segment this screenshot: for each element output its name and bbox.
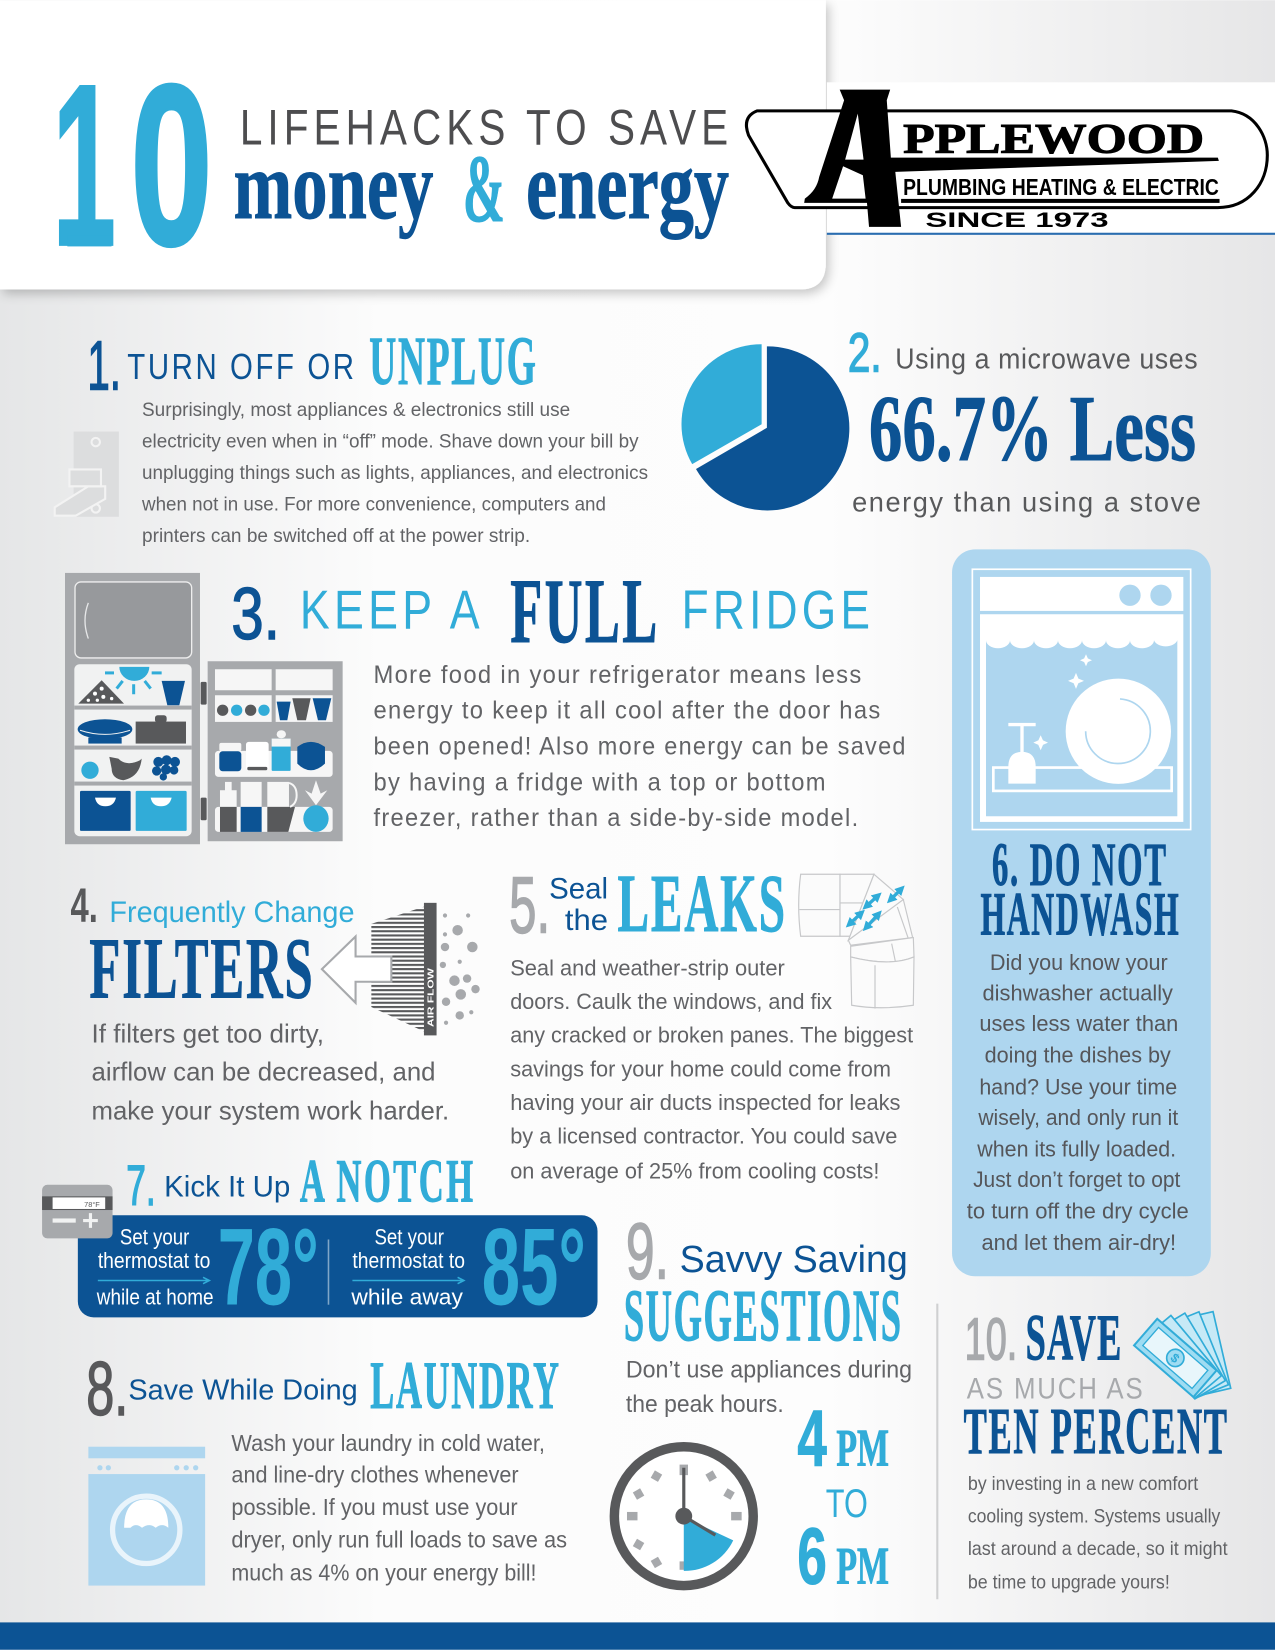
section 9: savvy saving suggestions: 9. — [626, 1206, 669, 1295]
text: leaks paragraph: savings for your home could come from — [510, 1056, 891, 1081]
icon: air duct — [799, 874, 914, 1009]
text: 4 pm to 6 pm: 4 — [797, 1394, 827, 1483]
panel: thermostat temperatures: thermostat to — [352, 1248, 465, 1273]
section 5: seal the leaks: Seal — [549, 873, 608, 906]
text: fridge paragraph: by having a fridge with a top or bottom — [373, 769, 827, 796]
text: fridge paragraph: energy to keep it all cool after the door has — [373, 698, 882, 725]
section 2: microwave pie chart — [681, 344, 848, 509]
section 1: turn off or unplug — [55, 323, 648, 547]
section 3: keep a full fridge heading: FULL — [510, 561, 660, 663]
icon: fridge — [65, 573, 343, 844]
section 10: save as much as ten percent: 10. — [965, 1307, 1017, 1372]
icon: washing machine — [88, 1447, 205, 1586]
text: 4 pm to 6 pm — [797, 1394, 889, 1600]
text: peak hours paragraph: the peak hours. — [626, 1392, 784, 1418]
text: peak hours paragraph: Don’t use appliances during — [626, 1357, 912, 1383]
text: handwash paragraph: Did you know your — [990, 950, 1168, 975]
heading: money and energy: energy — [526, 132, 729, 239]
section 7: kick it up a notch: Kick It Up — [164, 1170, 290, 1203]
text: filters paragraph: airflow can be decreased, and — [92, 1059, 436, 1087]
logo: Applewood — [746, 82, 1275, 235]
section 4: frequently change filters — [70, 879, 480, 1126]
panel: thermostat temperatures: 78° — [218, 1207, 319, 1329]
text: ten percent paragraph — [968, 1473, 1228, 1594]
text: ten percent paragraph: by investing in a new comfort — [968, 1473, 1199, 1495]
text: laundry paragraph — [231, 1430, 567, 1585]
section 8: save while doing laundry: Save While Doing — [128, 1374, 358, 1406]
section 8: save while doing laundry: 8. — [86, 1347, 128, 1432]
section 5: seal the leaks — [509, 857, 914, 1183]
section 7: kick it up a notch — [42, 1149, 598, 1329]
section 9: savvy saving suggestions — [614, 1206, 912, 1600]
icon: dishwasher — [972, 569, 1191, 830]
text: filters paragraph — [92, 1021, 449, 1126]
panel: thermostat temperatures: Set your — [375, 1225, 444, 1250]
text: handwash paragraph: Just don’t forget to opt — [973, 1167, 1181, 1192]
icon: switch — [55, 432, 119, 517]
icon: money — [1134, 1312, 1231, 1399]
text: handwash paragraph: to turn off the dry cycle — [967, 1198, 1189, 1223]
text: filters paragraph: If filters get too dirty, — [92, 1021, 324, 1049]
text: handwash paragraph — [967, 950, 1189, 1255]
text: fridge paragraph: been opened! Also more energy can be saved — [373, 734, 907, 761]
text: fridge paragraph: freezer, rather than a side-by-side model. — [373, 805, 859, 832]
logo: Applewood: PPLEWOOD — [903, 116, 1204, 163]
text: leaks paragraph: on average of 25% from cooling costs! — [510, 1158, 879, 1183]
panel: thermostat temperatures: thermostat to — [98, 1248, 210, 1273]
footer bar — [0, 1622, 1275, 1650]
section 5: seal the leaks: the — [565, 904, 608, 937]
section 2: microwave text: energy than using a stove — [852, 487, 1202, 518]
panel: thermostat temperatures: while away — [350, 1285, 463, 1310]
text: handwash paragraph: hand? Use your time — [979, 1074, 1177, 1099]
text: handwash paragraph: and let them air-dry! — [981, 1230, 1176, 1255]
text: leaks paragraph: having your air ducts inspected for leaks — [510, 1090, 900, 1115]
text: 4 pm to 6 pm: PM — [836, 1537, 889, 1595]
section 7: kick it up a notch: 7. — [126, 1155, 156, 1218]
section 10: save as much as ten percent: AS MUCH AS — [967, 1372, 1145, 1405]
logo: Applewood: SINCE 1973 — [925, 207, 1109, 232]
section 1: turn off or unplug: UNPLUG — [369, 323, 538, 399]
section 8: save while doing laundry: LAUNDRY — [370, 1348, 561, 1423]
section 10: save as much as ten percent: SAVE — [1026, 1302, 1122, 1374]
text: ten percent paragraph: cooling system. Systems usually — [968, 1505, 1221, 1527]
section 5: seal the leaks: 5. — [509, 860, 550, 949]
heading: money and energy: & — [463, 135, 505, 242]
section 3: keep a full fridge heading: 3. — [231, 572, 280, 655]
section 2: microwave text: 2. — [848, 322, 882, 384]
header panel — [0, 0, 826, 290]
text: unplug paragraph — [141, 399, 648, 547]
section 2: microwave text — [848, 322, 1202, 518]
icon: airflow arrow — [322, 937, 391, 1003]
text: ten percent paragraph: last around a decade, so it might — [968, 1538, 1228, 1560]
text: handwash paragraph: doing the dishes by — [985, 1043, 1172, 1068]
text: unplug paragraph: unplugging things such as lights, appliances, and electronics — [142, 462, 648, 484]
section 9: savvy saving suggestions: Savvy Saving — [680, 1239, 908, 1281]
text: unplug paragraph: printers can be switched off at the power strip. — [142, 525, 530, 547]
text: leaks paragraph: by a licensed contractor. You could save — [510, 1124, 897, 1149]
text: leaks paragraph: doors. Caulk the windows, and fix — [510, 989, 833, 1014]
text: 4 pm to 6 pm: PM — [836, 1420, 889, 1478]
panel: thermostat temperatures: 85° — [482, 1207, 586, 1329]
text: handwash paragraph: wisely, and only run it — [977, 1105, 1179, 1130]
icon: money: $ — [1168, 1351, 1182, 1366]
text: peak hours paragraph — [626, 1357, 912, 1418]
panel: section 6 do not handwash — [952, 549, 1211, 1276]
section 3: keep a full fridge heading — [231, 561, 874, 663]
text: laundry paragraph: dryer, only run full loads to save as — [231, 1527, 567, 1553]
text: handwash paragraph: uses less water than — [979, 1011, 1178, 1036]
text: handwash paragraph: dishwasher actually — [983, 981, 1174, 1006]
text: laundry paragraph: and line-dry clothes whenever — [231, 1461, 519, 1487]
icon: air filter: AIR FLOW — [425, 968, 435, 1027]
text: 4 pm to 6 pm: 6 — [797, 1511, 827, 1600]
section 4: frequently change filters: FILTERS — [89, 920, 315, 1017]
text: handwash paragraph: when its fully loaded. — [976, 1136, 1176, 1161]
text: ten percent paragraph: be time to upgrade yours! — [968, 1572, 1170, 1594]
icon: thermostat — [42, 1185, 113, 1238]
text: leaks paragraph — [510, 955, 914, 1183]
heading: money and energy — [234, 132, 729, 242]
section 10: save as much as ten percent — [964, 1302, 1231, 1594]
text: laundry paragraph: possible. If you must use your — [231, 1494, 518, 1520]
section 4: frequently change filters: Frequently Change — [109, 896, 355, 929]
panel: thermostat temperatures: while at home — [96, 1285, 214, 1310]
section 1: turn off or unplug: TURN OFF OR — [127, 347, 357, 387]
text: filters paragraph: make your system work harder. — [92, 1098, 449, 1126]
section 8: save while doing laundry — [86, 1347, 567, 1586]
section 1: turn off or unplug: 1. — [87, 326, 121, 404]
text: unplug paragraph: when not in use. For more convenience, computers and — [141, 493, 606, 515]
icon: clock — [614, 1447, 753, 1586]
text: 4 pm to 6 pm: TO — [826, 1482, 868, 1526]
panel: thermostat temperatures: Set your — [120, 1225, 189, 1250]
icon: thermostat: 78°F — [84, 1200, 100, 1209]
section 3: keep a full fridge heading: FRIDGE — [682, 578, 874, 640]
text: unplug paragraph: Surprisingly, most appliances & electronics still use — [142, 399, 570, 421]
section 9: savvy saving suggestions: SUGGESTIONS — [624, 1274, 903, 1356]
text: unplug paragraph: electricity even when in “off” mode. Shave down your bill by — [142, 430, 639, 452]
heading: number 10: 0 — [130, 36, 212, 293]
text: leaks paragraph: Seal and weather-strip outer — [510, 955, 785, 980]
heading: number 10: 1 — [53, 36, 116, 293]
text: laundry paragraph: much as 4% on your energy bill! — [231, 1559, 537, 1585]
text: leaks paragraph: any cracked or broken panes. The biggest — [510, 1023, 914, 1048]
section 3: keep a full fridge heading: KEEP A — [300, 578, 484, 640]
heading: lifehacks to save: LIFEHACKS TO SAVE — [240, 98, 733, 155]
section 7: kick it up a notch: A NOTCH — [300, 1149, 475, 1216]
heading: money and energy: money — [234, 132, 433, 239]
section 5: seal the leaks: LEAKS — [618, 857, 787, 949]
panel: thermostat temperatures — [78, 1207, 598, 1329]
section 2: microwave text: Using a microwave uses — [895, 343, 1198, 375]
text: laundry paragraph: Wash your laundry in cold water, — [231, 1430, 545, 1456]
text: fridge paragraph — [373, 662, 907, 832]
icon: air filter — [371, 903, 480, 1035]
text: fridge paragraph: More food in your refrigerator means less — [373, 662, 863, 689]
section 4: frequently change filters: 4. — [70, 879, 98, 933]
